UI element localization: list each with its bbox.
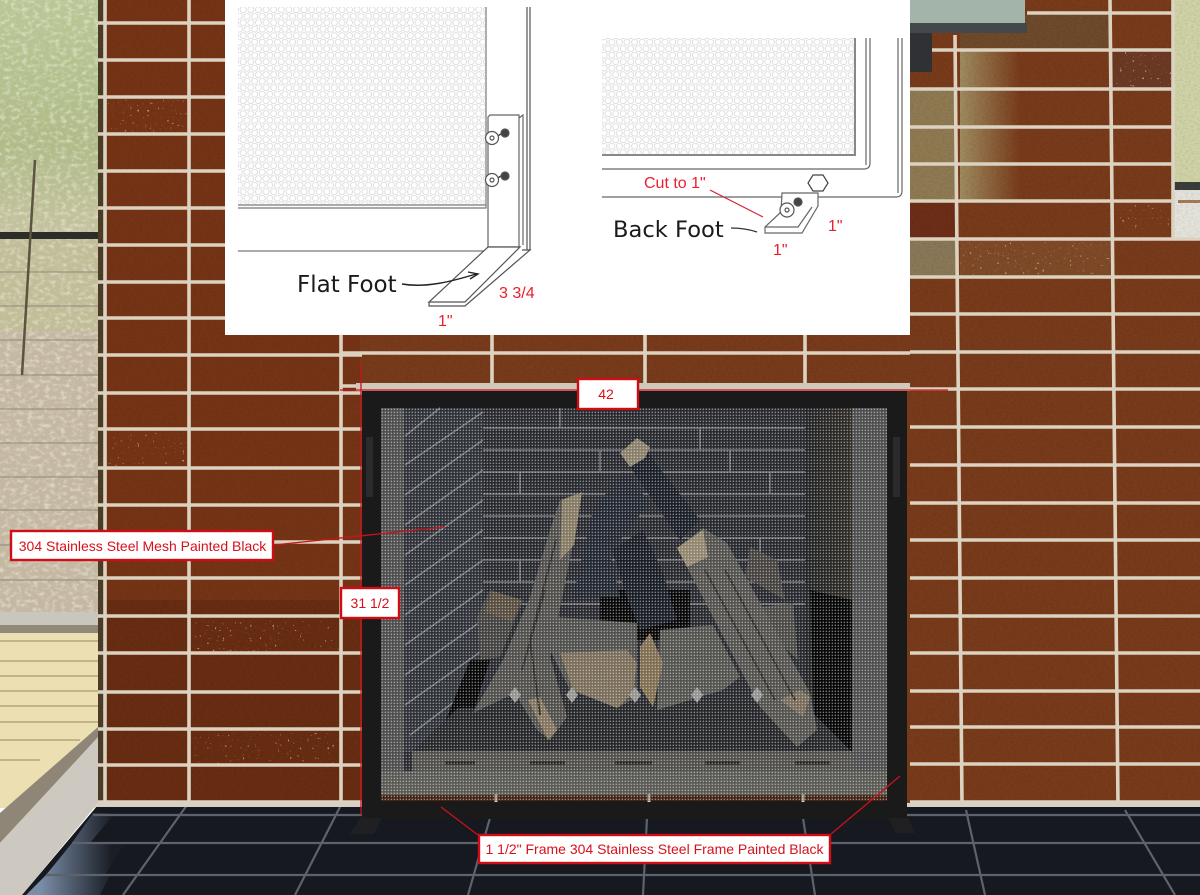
frame handles [366,437,900,497]
right side wall in shadow [805,408,852,752]
leader: mesh callout [274,527,445,545]
firebox back wall [381,408,887,800]
large right log [677,528,817,747]
label: cut to 1 inch: Cut to 1" [644,175,706,192]
stone lip [412,751,852,771]
dimension: flat foot width: 1" [438,313,453,330]
dimension: back foot height: 1" [828,218,843,235]
black void behind logs [445,590,852,752]
callout: height 31 1/2: 31 1/2 [351,595,390,611]
outdoor view right of the brick wall [1172,0,1200,238]
outdoor view left of the brick wall [0,0,100,895]
mortar joints: left section [98,0,362,805]
drawing: back foot [602,38,902,233]
white panel with foot drawings [225,0,910,335]
label: back foot: Back Foot [613,217,724,243]
dimension: flat foot length: 3 3/4 [499,285,535,302]
large left log [473,492,582,740]
leader: cut to 1 inch [710,190,763,217]
charred logs [573,438,700,630]
mortar joints: middle strip [341,335,910,386]
speckled glazed bricks [108,52,1171,764]
feet [350,818,915,834]
drawing: flat foot [238,7,530,306]
callout: mesh material: 304 Stainless Steel Mesh Painted Black [19,538,267,554]
arrow: flat foot [402,272,478,285]
callout: width 42: 42 [598,386,614,402]
brick reveal joints [496,794,803,802]
pebble floor [412,700,852,752]
leader: back foot [731,228,757,232]
callout: frame material [479,835,830,863]
tile floor [22,803,1200,895]
back wall brick courses [483,408,805,604]
centre logs [550,617,740,710]
dimension: back foot width: 1" [773,242,788,259]
leaders: frame callout [441,776,900,835]
fireplace screen [350,391,915,834]
frame: painted black [362,391,907,819]
callout: height 31 1/2 [341,588,399,618]
dimension lines [340,362,948,815]
mesh border strips [381,408,887,785]
framed picture and bracket, top right [910,0,1027,72]
callout: width 42 [578,379,638,409]
mortar joints: right section [910,0,1200,805]
back logs [477,547,798,660]
log supports [509,687,763,703]
callout: mesh material [11,531,273,560]
stainless mesh overlay [381,408,887,801]
left side wall with diagonal brick courses [400,408,483,752]
callout: frame material: 1 1/2" Frame 304 Stainless Steel Frame Painted Black [485,841,825,857]
label: flat foot: Flat Foot [297,272,397,298]
ledge marks [445,762,830,764]
